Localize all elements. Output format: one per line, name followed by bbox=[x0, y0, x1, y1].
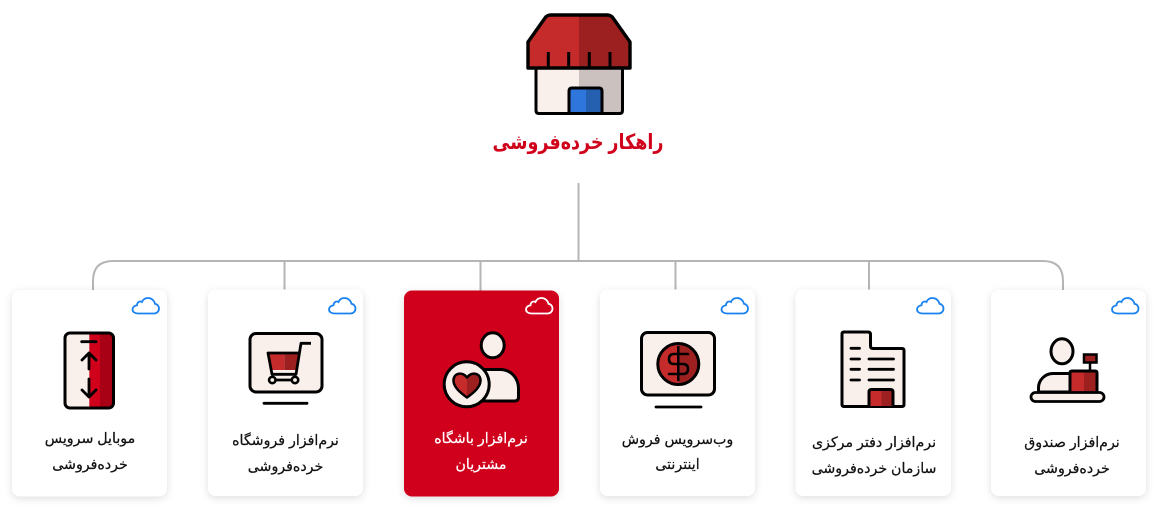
icon: cloud bbox=[722, 298, 748, 314]
connector lines bbox=[93, 183, 1063, 291]
icon: cloud bbox=[526, 298, 552, 314]
icon: cloud bbox=[329, 298, 356, 314]
label line 2: خرده‌فروشی bbox=[248, 459, 323, 475]
icon: cloud bbox=[132, 298, 159, 314]
label: موبایل سرویس bbox=[45, 431, 135, 447]
label line 2: خرده‌فروشی bbox=[52, 457, 128, 473]
label: نرم‌افزار دفتر مرکزی bbox=[812, 435, 936, 451]
icon: cloud bbox=[1112, 298, 1138, 314]
icon: shopping cart monitor bbox=[250, 334, 322, 403]
panel: store software bbox=[208, 290, 363, 496]
label: نرم‌افزار صندوق bbox=[1024, 435, 1120, 451]
label line 2: مشتریان bbox=[455, 457, 507, 473]
title: راهکار خرده‌فروشی bbox=[492, 131, 664, 154]
icon: customer with heart bbox=[444, 333, 518, 407]
label line 2: سازمان خرده‌فروشی bbox=[812, 461, 936, 477]
icon: cloud bbox=[917, 298, 944, 314]
label line 2: اینترنتی bbox=[655, 457, 700, 473]
icon: dollar monitor bbox=[642, 332, 714, 407]
icon: mobile phone bbox=[65, 333, 114, 408]
panel: head office software bbox=[796, 290, 951, 496]
label: وب‌سرویس فروش bbox=[622, 432, 733, 448]
label: نرم‌افزار فروشگاه bbox=[232, 432, 339, 449]
panel: retail POS software bbox=[991, 290, 1146, 496]
label: نرم‌افزار باشگاه bbox=[434, 430, 528, 447]
panel: online sales web service bbox=[600, 290, 755, 496]
icon: cashier bbox=[1031, 339, 1104, 402]
label line 2: خرده‌فروشی bbox=[1034, 461, 1110, 477]
icon: store bbox=[528, 15, 630, 114]
panel: mobile service bbox=[12, 290, 167, 496]
icon: office building bbox=[842, 332, 904, 406]
panel: customer club software bbox=[404, 290, 559, 496]
